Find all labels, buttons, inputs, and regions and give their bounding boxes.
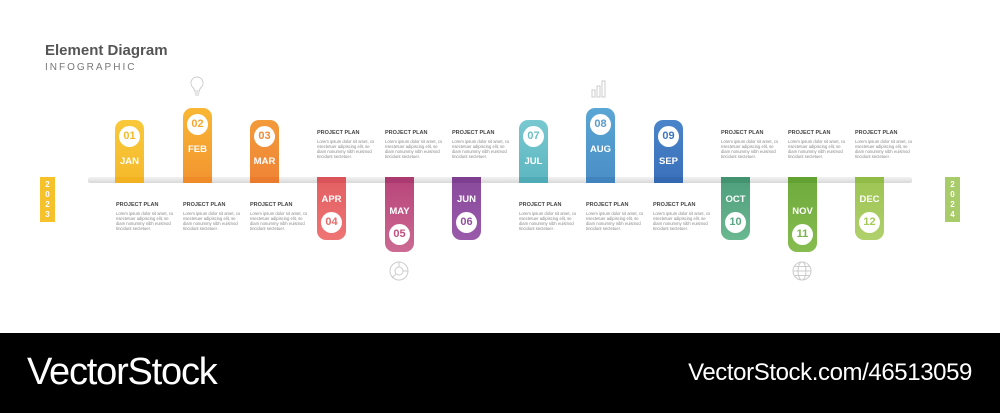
text: FEB <box>183 202 240 231</box>
icon: lightbulb <box>190 76 204 96</box>
year: 2023: 0 <box>45 190 50 199</box>
text: MAR: Lorem ipsum dolor sit amet, co nsectetuer adipiscing elit, se diam nonummy nibh euismod tincidunt sectetuer. <box>250 211 307 231</box>
footer logo: VectorStock <box>27 351 217 393</box>
timeline bar <box>88 177 912 183</box>
text: FEB: Lorem ipsum dolor sit amet, co nsectetuer adipiscing elit, se diam nonummy nibh euismod tincidunt sectetuer. <box>183 211 240 231</box>
tab: NOV: NOV <box>792 206 813 217</box>
text: AUG <box>586 202 643 231</box>
year: 2023 <box>40 177 55 222</box>
footer url: VectorStock.com/46513059 <box>688 359 972 386</box>
tab: SEP <box>654 120 683 183</box>
text: MAR <box>250 202 307 231</box>
text: DEC: Lorem ipsum dolor sit amet, co nsectetuer adipiscing elit, se diam nonummy nibh euismod tincidunt sectetuer. <box>855 139 912 159</box>
year: 2024: 2 <box>950 200 955 209</box>
icon: bar chart <box>592 80 606 98</box>
year: 2024 <box>945 177 960 222</box>
text: OCT: Lorem ipsum dolor sit amet, co nsectetuer adipiscing elit, se diam nonummy nibh euismod tincidunt sectetuer. <box>721 139 778 159</box>
tab: AUG: 08 <box>594 118 607 130</box>
year: 2023: 3 <box>45 210 50 219</box>
text: JUL: PROJECT PLAN <box>519 202 561 208</box>
text: OCT <box>721 130 778 159</box>
text: JUL <box>519 202 576 231</box>
tab: JAN <box>115 120 144 183</box>
tab: OCT: OCT <box>725 194 746 205</box>
text: SEP: PROJECT PLAN <box>653 202 695 208</box>
tab: JUL: 07 <box>527 130 540 142</box>
tab: JAN: JAN <box>120 156 139 167</box>
text: JUN: PROJECT PLAN <box>452 130 494 136</box>
year: 2024: 2 <box>950 180 955 189</box>
text: JAN: Lorem ipsum dolor sit amet, co nsectetuer adipiscing elit, se diam nonummy nibh euismod tincidunt sectetuer. <box>116 211 173 231</box>
tab: FEB <box>183 108 212 183</box>
tab: NOV <box>788 177 817 252</box>
tab: MAR: MAR <box>254 156 275 167</box>
tab: APR: APR <box>321 194 342 205</box>
text: NOV: PROJECT PLAN <box>788 130 830 136</box>
year: 2024: 0 <box>950 190 955 199</box>
text: AUG: PROJECT PLAN <box>586 202 628 208</box>
text: JUL: Lorem ipsum dolor sit amet, co nsectetuer adipiscing elit, se diam nonummy nibh euismod tincidunt sectetuer. <box>519 211 576 231</box>
tab: DEC: 12 <box>863 216 876 228</box>
text: APR: PROJECT PLAN <box>317 130 359 136</box>
tab: FEB: 02 <box>191 118 204 130</box>
text: FEB: PROJECT PLAN <box>183 202 225 208</box>
tab: JUN: JUN <box>457 194 476 205</box>
text: JUN <box>452 130 509 159</box>
text: MAY: Lorem ipsum dolor sit amet, co nsectetuer adipiscing elit, se diam nonummy nibh euismod tincidunt sectetuer. <box>385 139 442 159</box>
icon: donut chart <box>390 262 408 280</box>
tab: MAY: 05 <box>393 228 406 240</box>
tab: SEP: 09 <box>662 130 675 142</box>
footer <box>0 333 1000 413</box>
tab: MAR: 03 <box>258 130 271 142</box>
text: MAY: PROJECT PLAN <box>385 130 427 136</box>
year: 2024: 4 <box>950 210 955 219</box>
text: JAN <box>116 202 173 231</box>
tab: SEP: SEP <box>659 156 678 167</box>
tab: APR <box>317 177 346 240</box>
text: APR: Lorem ipsum dolor sit amet, co nsectetuer adipiscing elit, se diam nonummy nibh euismod tincidunt sectetuer. <box>317 139 374 159</box>
text: OCT: PROJECT PLAN <box>721 130 763 136</box>
tab: APR: 04 <box>325 216 338 228</box>
tab: JUN: 06 <box>460 216 473 228</box>
text: SEP <box>653 202 710 231</box>
text: NOV: Lorem ipsum dolor sit amet, co nsectetuer adipiscing elit, se diam nonummy nibh euismod tincidunt sectetuer. <box>788 139 845 159</box>
tab: JUL: JUL <box>525 156 542 167</box>
tab: DEC <box>855 177 884 240</box>
year: 2023: 2 <box>45 180 50 189</box>
tab: NOV: 11 <box>797 228 808 240</box>
text: NOV <box>788 130 845 159</box>
tab: MAY: MAY <box>389 206 410 217</box>
text: JUN: Lorem ipsum dolor sit amet, co nsectetuer adipiscing elit, se diam nonummy nibh euismod tincidunt sectetuer. <box>452 139 509 159</box>
text: DEC: PROJECT PLAN <box>855 130 897 136</box>
text: AUG: Lorem ipsum dolor sit amet, co nsectetuer adipiscing elit, se diam nonummy nibh euismod tincidunt sectetuer. <box>586 211 643 231</box>
text: DEC <box>855 130 912 159</box>
text: APR <box>317 130 374 159</box>
icon: globe <box>792 262 812 280</box>
tab: FEB: FEB <box>188 144 207 155</box>
tab: JUL <box>519 120 548 183</box>
text: MAR: PROJECT PLAN <box>250 202 292 208</box>
tab: MAR <box>250 120 279 183</box>
text: SEP: Lorem ipsum dolor sit amet, co nsectetuer adipiscing elit, se diam nonummy nibh euismod tincidunt sectetuer. <box>653 211 710 231</box>
tab: JAN: 01 <box>123 130 136 142</box>
title: Element Diagram <box>45 42 168 59</box>
tab: DEC: DEC <box>859 194 880 205</box>
text: MAY <box>385 130 442 159</box>
subtitle: INFOGRAPHIC <box>45 62 136 73</box>
tab: OCT <box>721 177 750 240</box>
text: JAN: PROJECT PLAN <box>116 202 158 208</box>
tab: AUG: AUG <box>590 144 611 155</box>
tab: OCT: 10 <box>729 216 742 228</box>
tab: AUG <box>586 108 615 183</box>
tab: JUN <box>452 177 481 240</box>
tab: MAY <box>385 177 414 252</box>
year: 2023: 2 <box>45 200 50 209</box>
